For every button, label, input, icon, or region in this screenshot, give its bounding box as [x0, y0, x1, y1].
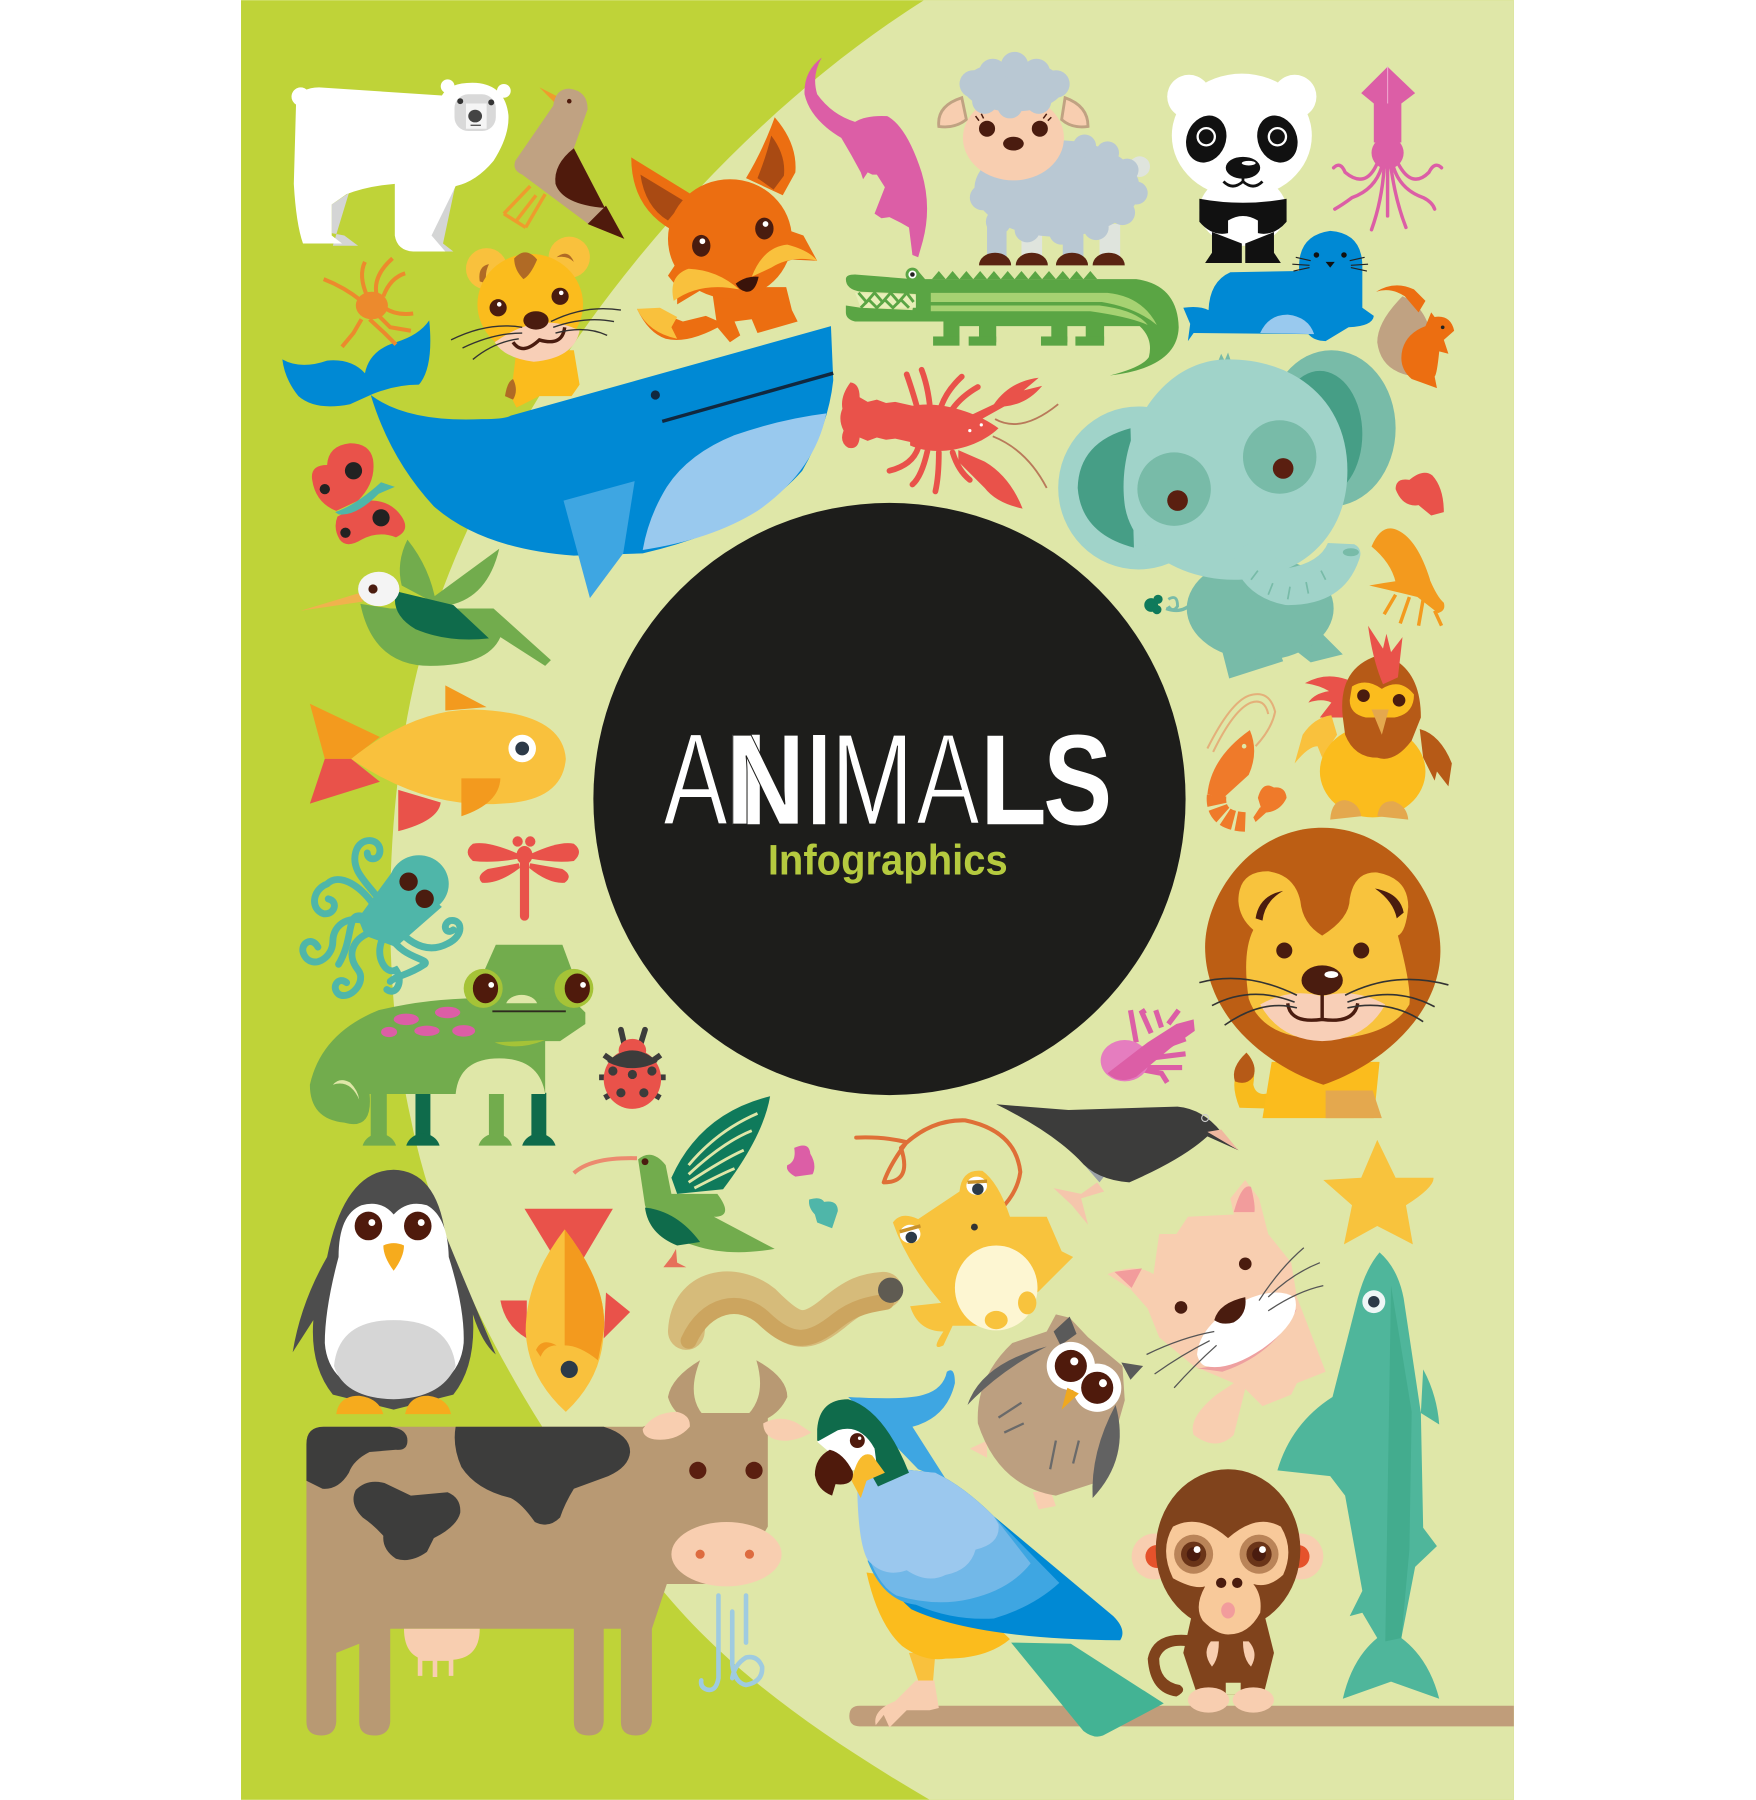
hummingbird [574, 1096, 775, 1267]
worm [686, 1278, 903, 1341]
lobster [840, 370, 1058, 509]
title: ANIMALS [663, 706, 1112, 852]
background: lime panel [241, 0, 1514, 1800]
parrot [815, 1370, 1164, 1737]
blackbird [996, 1104, 1238, 1225]
wasp [1369, 528, 1444, 626]
panda [1167, 74, 1316, 263]
shrimp [1207, 694, 1287, 822]
subtitle: Infographics: Infographics [768, 837, 1008, 884]
monkey [1132, 1469, 1323, 1713]
title: ANIMALS: I [801, 708, 837, 852]
rooster [1295, 626, 1452, 820]
seal [1183, 231, 1374, 341]
lion [1199, 828, 1448, 1118]
whale [282, 320, 833, 598]
background: pale green swoosh [390, 0, 1514, 1800]
small pink bug [787, 1145, 814, 1177]
branch [849, 1706, 1514, 1726]
tiger cub [451, 237, 621, 408]
title: ANIMALS: M [831, 708, 914, 852]
fish: vertical [500, 1209, 630, 1412]
elephant [1058, 350, 1396, 678]
star [1323, 1140, 1434, 1244]
cow [306, 1360, 811, 1736]
polar bear [292, 79, 511, 252]
crocodile [846, 268, 1179, 375]
ladybird [599, 1030, 666, 1109]
small teal bug [809, 1198, 838, 1228]
spider: orange [324, 258, 413, 347]
chameleon [310, 945, 593, 1146]
title circle [593, 503, 1186, 1095]
penguin [293, 1170, 496, 1414]
title: ANIMALS: L [980, 709, 1047, 852]
title: ANIMALS: N [725, 708, 806, 852]
pink spider [1101, 1010, 1195, 1082]
owl [968, 1314, 1143, 1509]
sheep [939, 52, 1150, 265]
otter [804, 58, 927, 257]
shark [1277, 1252, 1439, 1699]
title: ANIMALS: S [1043, 709, 1112, 852]
cat [1108, 1180, 1326, 1443]
title: ANIMALS: A [663, 706, 728, 852]
squirrel [1376, 285, 1454, 388]
frog [856, 1120, 1073, 1347]
squid [1334, 67, 1442, 230]
fox [631, 117, 817, 342]
cow drool [701, 1596, 762, 1690]
title: ANIMALS: A [916, 706, 980, 852]
green bird [301, 540, 551, 666]
gull [504, 87, 624, 239]
butterfly [312, 443, 405, 544]
octopus [303, 841, 460, 996]
small red bug [1396, 473, 1444, 516]
dragonfly [468, 836, 579, 921]
fish: yellow horizontal [310, 685, 566, 831]
